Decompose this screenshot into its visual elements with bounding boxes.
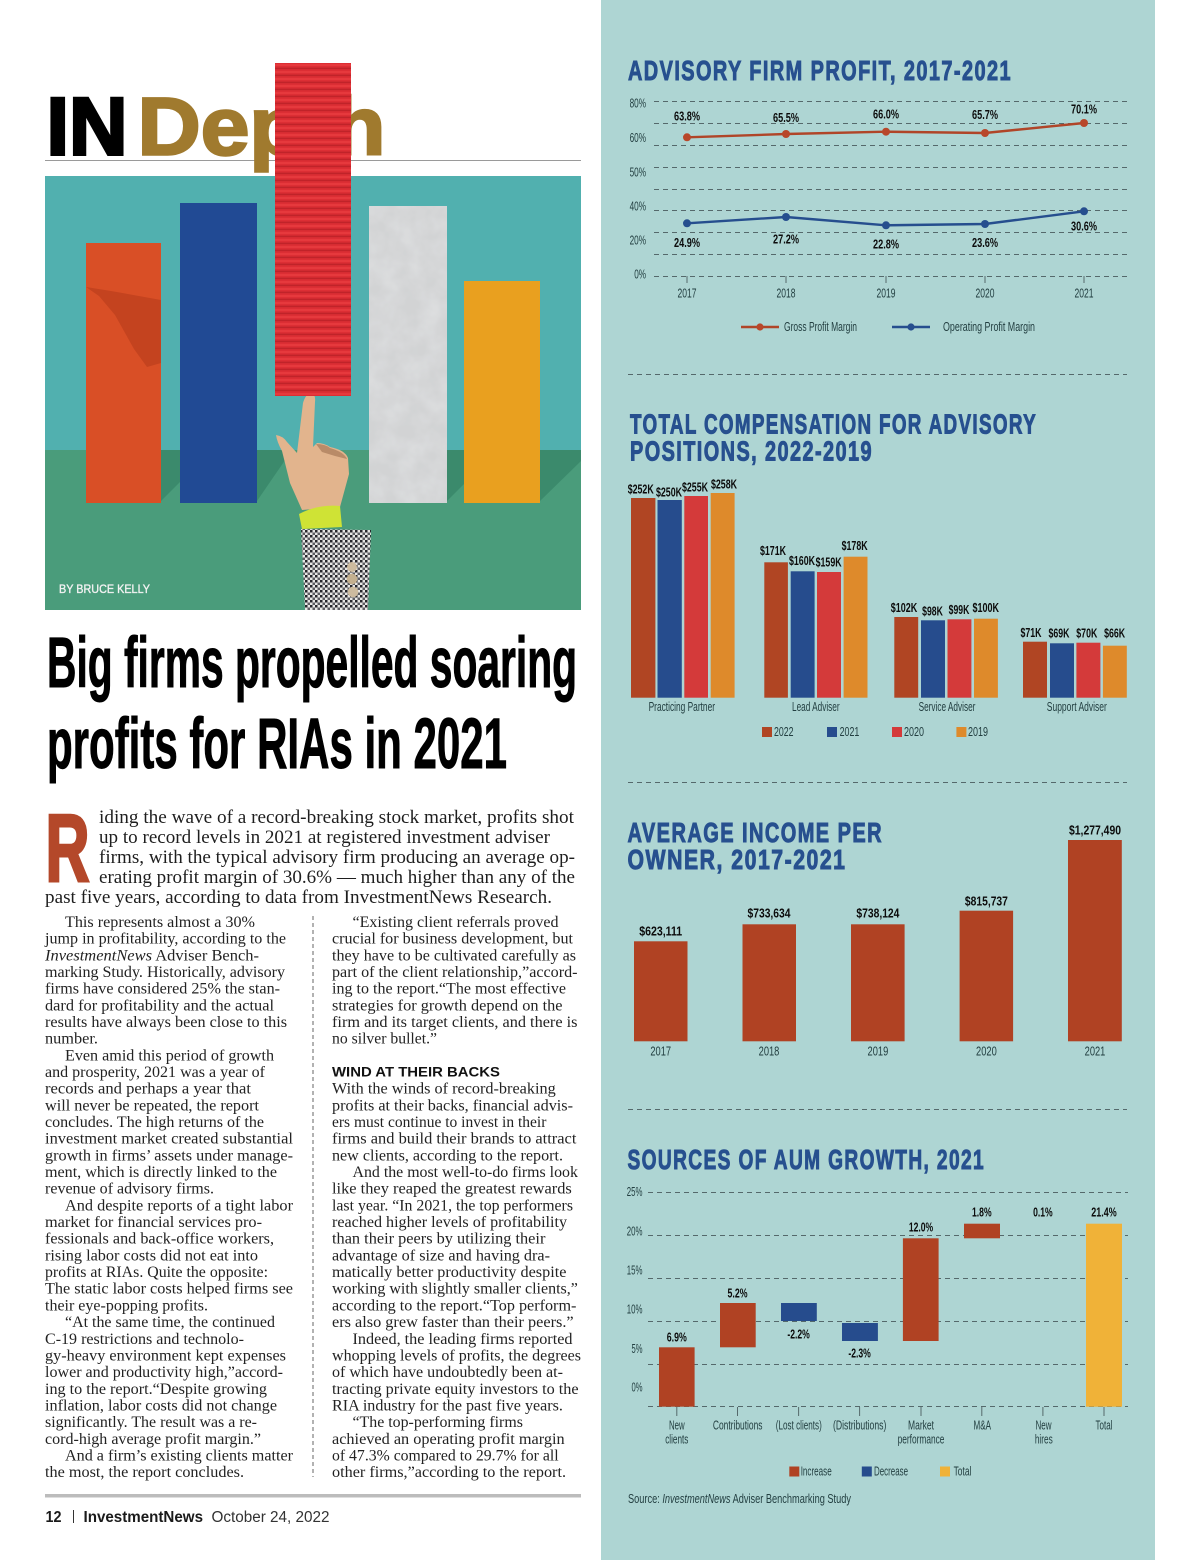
value labels: $99K: [949, 603, 969, 617]
body text: left column: Even amid this period of growth: [65, 1047, 274, 1064]
value labels: 65.7%: [972, 108, 998, 122]
y axis labels: 0%: [634, 266, 646, 282]
legend: Decrease: [874, 1464, 908, 1479]
y axis labels: 10%: [627, 1302, 643, 1317]
body text: left column: records and perhaps a year that: [45, 1081, 252, 1098]
body text: left column: And despite reports of a tight labor: [65, 1197, 294, 1214]
body text: left column: revenue of advisory firms.: [45, 1181, 214, 1198]
x axis labels: 2017: [678, 286, 696, 300]
category labels: [649, 699, 1107, 714]
value labels: $159K: [816, 556, 842, 570]
section title: INDepth: IN: [46, 82, 128, 172]
value labels: 22.8%: [873, 238, 899, 252]
body text: right column: ing to the report.“The most effective: [332, 981, 566, 998]
intro text: [45, 807, 575, 908]
value labels: 12.0%: [909, 1220, 933, 1234]
waterfall bars: [659, 1224, 1122, 1407]
y axis labels: 80%: [630, 96, 646, 110]
panel: teal sidebar background: [601, 0, 1155, 1560]
value labels: [674, 102, 1097, 252]
section title: INDepth: [46, 82, 386, 172]
gridlines: [648, 1192, 1128, 1406]
body text: right column: last year. “In 2021, the top performers: [332, 1197, 573, 1214]
body text: right column: crucial for business development, but: [332, 931, 574, 948]
chart title: AVERAGE INCOME PER: [628, 817, 883, 848]
body text: right column: Indeed, the leading firms reported: [352, 1331, 572, 1348]
bars: [634, 840, 1122, 1041]
footer: folio: [46, 1509, 330, 1526]
legend: Increase: [801, 1464, 832, 1479]
chart panel: sources of AUM growth: [627, 1144, 1128, 1506]
body text: left column: cord-high average profit margin.”: [45, 1431, 261, 1448]
value labels: 70.1%: [1071, 102, 1097, 116]
value labels: [639, 823, 1121, 938]
headline: profits for RIAs in 2021: [47, 705, 507, 784]
value labels: 5.2%: [728, 1286, 748, 1300]
intro text: erating profit margin of 30.6% — much higher than any of the: [99, 867, 575, 888]
value labels: $178K: [842, 539, 868, 553]
body text: left column: marking Study. Historically, advisory: [45, 964, 285, 981]
category labels: New: [1036, 1418, 1052, 1432]
blue bar: [180, 203, 257, 503]
legend: 2019: [968, 724, 988, 739]
value labels: -2.2%: [787, 1327, 810, 1341]
body text: right column: other firms,”according to the report.: [332, 1464, 566, 1481]
y axis labels: [627, 1184, 643, 1395]
body text: left column: growth in firms’ assets under manage-: [45, 1147, 293, 1164]
chart title: SOURCES OF AUM GROWTH, 2021: [628, 1144, 985, 1175]
body text: left column: profits at RIAs. Quite the opposite:: [45, 1264, 268, 1281]
legend: [789, 1464, 971, 1479]
category labels: Service Adviser: [919, 699, 976, 714]
footer rule: [45, 1494, 581, 1498]
source note: Source: InvestmentNews Adviser Benchmarking Study: [628, 1491, 851, 1506]
body text: right column: of 47.3% compared to 29.7% for all: [332, 1447, 559, 1464]
y axis labels: 60%: [630, 130, 646, 145]
category labels: Support Adviser: [1047, 699, 1107, 714]
legend: Total: [954, 1464, 971, 1479]
value labels: 23.6%: [972, 236, 998, 250]
cover photo illustration: [45, 176, 581, 610]
body text: left column: lower and productivity high,”accord-: [45, 1364, 283, 1381]
category labels: [665, 1418, 1113, 1446]
category labels: Lead Adviser: [792, 699, 840, 714]
body text: right column: firm and its target clients, and there is: [332, 1014, 578, 1031]
body text: right column: than their peers by utilizing their: [332, 1231, 546, 1248]
legend: 2021: [840, 724, 859, 739]
year labels: 2020: [976, 1044, 997, 1059]
value labels: $255K: [682, 480, 708, 494]
intro text: up to record levels in 2021 at registered investment adviser: [99, 827, 551, 848]
value labels: $66K: [1104, 626, 1125, 640]
bars: service adviser: [894, 617, 998, 698]
legend: [741, 319, 1035, 334]
value labels: $102K: [891, 601, 917, 615]
value labels: $733,634: [748, 906, 791, 920]
wall and floor: [45, 176, 581, 610]
body text: left column: results have always been close to this: [45, 1014, 287, 1031]
chart panel: advisory firm profit: [628, 55, 1128, 334]
y axis labels: 40%: [630, 198, 646, 214]
body text: right column: of which have undoubtedly been at-: [332, 1364, 563, 1381]
chart panel: average income per owner: [628, 817, 1122, 1059]
houndstooth sleeve: [301, 529, 371, 610]
year labels: 2017: [650, 1044, 671, 1059]
bars: lead adviser: [764, 557, 868, 698]
intro paragraph with drop cap: [45, 795, 575, 908]
body text: left column: ing to the report.“Despite growing: [45, 1381, 267, 1398]
body text: left column: [44, 914, 294, 1481]
body text: right column: strategies for growth depend on the: [332, 997, 562, 1014]
body text: left column: This represents almost a 30%: [65, 914, 255, 931]
body text: left column: concludes. The high returns of the: [45, 1114, 264, 1131]
body text: right column: RIA industry for the past five years.: [332, 1397, 563, 1414]
gridlines: [654, 102, 1128, 276]
body text: right column: matically better productivity despite: [332, 1264, 566, 1281]
body text: right column: profits at their backs, financial advis-: [332, 1097, 573, 1114]
value labels: $1,277,490: [1069, 823, 1121, 837]
body text: right column: And the most well-to-do firms look: [352, 1164, 578, 1181]
value labels: [628, 477, 1125, 640]
value labels: $160K: [789, 554, 815, 568]
intro text: firms, with the typical advisory firm producing an average op-: [99, 847, 575, 868]
body text: left column: C-19 restrictions and technolo-: [45, 1331, 244, 1348]
body text: right column: [332, 914, 581, 1481]
category labels: Practicing Partner: [649, 699, 715, 714]
body text: right column: new clients, according to the report.: [332, 1147, 563, 1164]
chart title: OWNER, 2017-2021: [628, 844, 846, 875]
body text: left column: gy-heavy environment kept expenses: [45, 1347, 286, 1364]
legend: Operating Profit Margin: [943, 319, 1035, 334]
category labels: performance: [898, 1432, 944, 1446]
category labels: (Distributions): [833, 1418, 886, 1432]
x axis labels: 2019: [876, 286, 896, 300]
body text: left column: ment, which is directly linked to the: [45, 1164, 277, 1181]
value labels: $100K: [972, 601, 999, 615]
value labels: 24.9%: [674, 236, 700, 250]
body text: right column: ers must continue to invest in their: [332, 1114, 547, 1131]
body text: right column: With the winds of record-breaking: [332, 1081, 556, 1098]
x axis labels: 2021: [1074, 286, 1094, 300]
orange bar: [86, 243, 161, 503]
hand pointing up: [276, 394, 349, 510]
body text: left column: will never be repeated, the report: [45, 1097, 260, 1114]
value labels: $623,111: [639, 924, 682, 938]
headline: Big firms propelled soaring: [47, 624, 577, 703]
y axis labels: 25%: [627, 1184, 643, 1199]
body text: left column: firms have considered 25% the stan-: [45, 981, 280, 998]
byline: BY BRUCE KELLY: [59, 582, 150, 596]
operating profit margin line: [683, 207, 1088, 229]
value labels: $738,124: [856, 906, 899, 920]
subheading: wind at their backs: WIND AT THEIR BACKS: [332, 1064, 500, 1080]
body text: left column: And a firm’s existing clients matter: [65, 1447, 294, 1464]
body text: right column: working with slightly smaller clients,”: [332, 1281, 578, 1298]
chart title: ADVISORY FIRM PROFIT, 2017-2021: [628, 55, 1012, 86]
y axis labels: 5%: [632, 1341, 643, 1356]
value labels: $171K: [760, 544, 786, 558]
body text: left column: “At the same time, the continued: [65, 1314, 275, 1331]
bar shadows: [161, 450, 581, 501]
headline: [47, 624, 577, 784]
footer: folio: 12: [46, 1509, 62, 1526]
section title: INDepth: Depth: [138, 82, 386, 172]
yellow cuff: [299, 506, 342, 529]
value labels: $815,737: [965, 894, 1008, 908]
year labels: [650, 1044, 1105, 1059]
value labels: 27.2%: [773, 232, 799, 246]
corrugated red bar: [275, 63, 351, 396]
y axis labels: 20%: [630, 232, 646, 248]
y axis labels: 50%: [630, 164, 646, 180]
body text: left column: dard for profitability and the actual: [45, 997, 275, 1014]
section rule: [45, 160, 581, 161]
intro text: past five years, according to data from InvestmentNews Research.: [45, 887, 552, 908]
year labels: 2019: [868, 1044, 888, 1059]
footer: folio: October 24, 2022: [212, 1509, 330, 1526]
value labels: 66.0%: [873, 108, 899, 122]
body text: left column: The static labor costs helped firms see: [45, 1281, 293, 1298]
x axis labels: [678, 286, 1094, 300]
value labels: [667, 1206, 1117, 1360]
category labels: Market: [908, 1418, 934, 1432]
legend: 2020: [904, 724, 924, 739]
chart panel: total compensation: [628, 408, 1127, 739]
body text: left column: their eye-popping profits.: [45, 1297, 208, 1314]
body text: right column: “Existing client referrals proved: [352, 914, 558, 931]
body text: left column: inflation, labor costs did not change: [45, 1397, 277, 1414]
body text: right column: tracting private equity investors to the: [332, 1381, 579, 1398]
y axis labels: 20%: [627, 1223, 643, 1238]
chart title: POSITIONS, 2022-2019: [630, 436, 873, 466]
body text: right column: advantage of size and having dra-: [332, 1247, 550, 1264]
x axis ticks: [687, 276, 1084, 283]
body text: right column: like they reaped the greatest rewards: [332, 1181, 572, 1198]
category labels: Total: [1096, 1418, 1113, 1432]
bars: support adviser: [1023, 642, 1127, 698]
body text: right column: part of the client relationship,”accord-: [332, 964, 578, 981]
body text: left column: InvestmentNews Adviser Bench-: [44, 947, 259, 964]
value labels: $98K: [922, 604, 943, 618]
body text: right column: whopping levels of profits, the degrees: [332, 1347, 581, 1364]
body text: right column: they have to be cultivated carefully as: [332, 947, 576, 964]
body text: right column: “The top-performing firms: [352, 1414, 523, 1431]
bars: practicing partner: [631, 493, 735, 698]
category labels: M&A: [974, 1418, 991, 1432]
year labels: 2021: [1085, 1044, 1105, 1059]
legend: Gross Profit Margin: [784, 319, 857, 334]
value labels: 6.9%: [667, 1330, 687, 1344]
category labels: Contributions: [713, 1418, 763, 1432]
value labels: 65.5%: [773, 111, 799, 125]
y axis labels: 0%: [632, 1380, 643, 1395]
body text: left column: market for financial services pro-: [45, 1214, 262, 1231]
value labels: 1.8%: [972, 1206, 992, 1220]
body text: right column: achieved an operating profit margin: [332, 1431, 565, 1448]
x axis labels: 2020: [976, 286, 994, 300]
body text: left column: significantly. The result was a re-: [45, 1414, 257, 1431]
value labels: -2.3%: [848, 1346, 871, 1360]
value labels: $69K: [1048, 626, 1070, 640]
body text: left column: and prosperity, 2021 was a year of: [45, 1064, 266, 1081]
legend: 2022: [774, 724, 794, 739]
value labels: $258K: [711, 477, 737, 491]
body text: left column: number.: [45, 1031, 98, 1048]
x axis labels: 2018: [776, 286, 796, 300]
value labels: $71K: [1020, 626, 1042, 640]
body text: left column: rising labor costs did not eat into: [45, 1247, 258, 1264]
value labels: 21.4%: [1091, 1206, 1117, 1220]
grey stone bar: [369, 206, 447, 503]
value labels: $70K: [1076, 626, 1097, 640]
body text: right column: ers also grew faster than their peers.”: [332, 1314, 574, 1331]
body text: right column: according to the report.“Top perform-: [332, 1297, 576, 1314]
x axis ticks: [677, 1407, 1104, 1416]
body text: left column: the most, the report concludes.: [45, 1464, 244, 1481]
y axis labels: 15%: [627, 1262, 643, 1277]
chart title: [630, 408, 1037, 466]
year labels: 2018: [759, 1044, 779, 1059]
intro text: iding the wave of a record-breaking stock market, profits shot: [99, 807, 575, 828]
category labels: hires: [1035, 1432, 1053, 1446]
body text: left column: investment market created substantial: [45, 1131, 294, 1148]
value labels: 0.1%: [1033, 1206, 1053, 1220]
yellow bar: [464, 281, 540, 503]
chart title: [628, 817, 883, 875]
drop cap R: R: [46, 795, 90, 902]
legend: [762, 724, 988, 739]
value labels: 30.6%: [1071, 220, 1097, 234]
body text: left column: jump in profitability, according to the: [44, 931, 286, 948]
category labels: clients: [665, 1432, 689, 1446]
column divider: [312, 916, 314, 1477]
category labels: New: [669, 1418, 685, 1432]
body text: right column: no silver bullet.”: [332, 1031, 437, 1048]
value labels: $250K: [656, 486, 682, 500]
value labels: 63.8%: [674, 110, 700, 124]
value labels: $252K: [628, 482, 654, 496]
body text: right column: reached higher levels of profitability: [332, 1214, 567, 1231]
y axis labels: [630, 96, 646, 282]
category labels: (Lost clients): [776, 1418, 822, 1432]
gross profit margin line: [683, 119, 1088, 141]
footer: folio: InvestmentNews: [84, 1509, 203, 1526]
body text: left column: fessionals and back-office workers,: [45, 1231, 274, 1248]
body text: right column: firms and build their brands to attract: [332, 1131, 577, 1148]
